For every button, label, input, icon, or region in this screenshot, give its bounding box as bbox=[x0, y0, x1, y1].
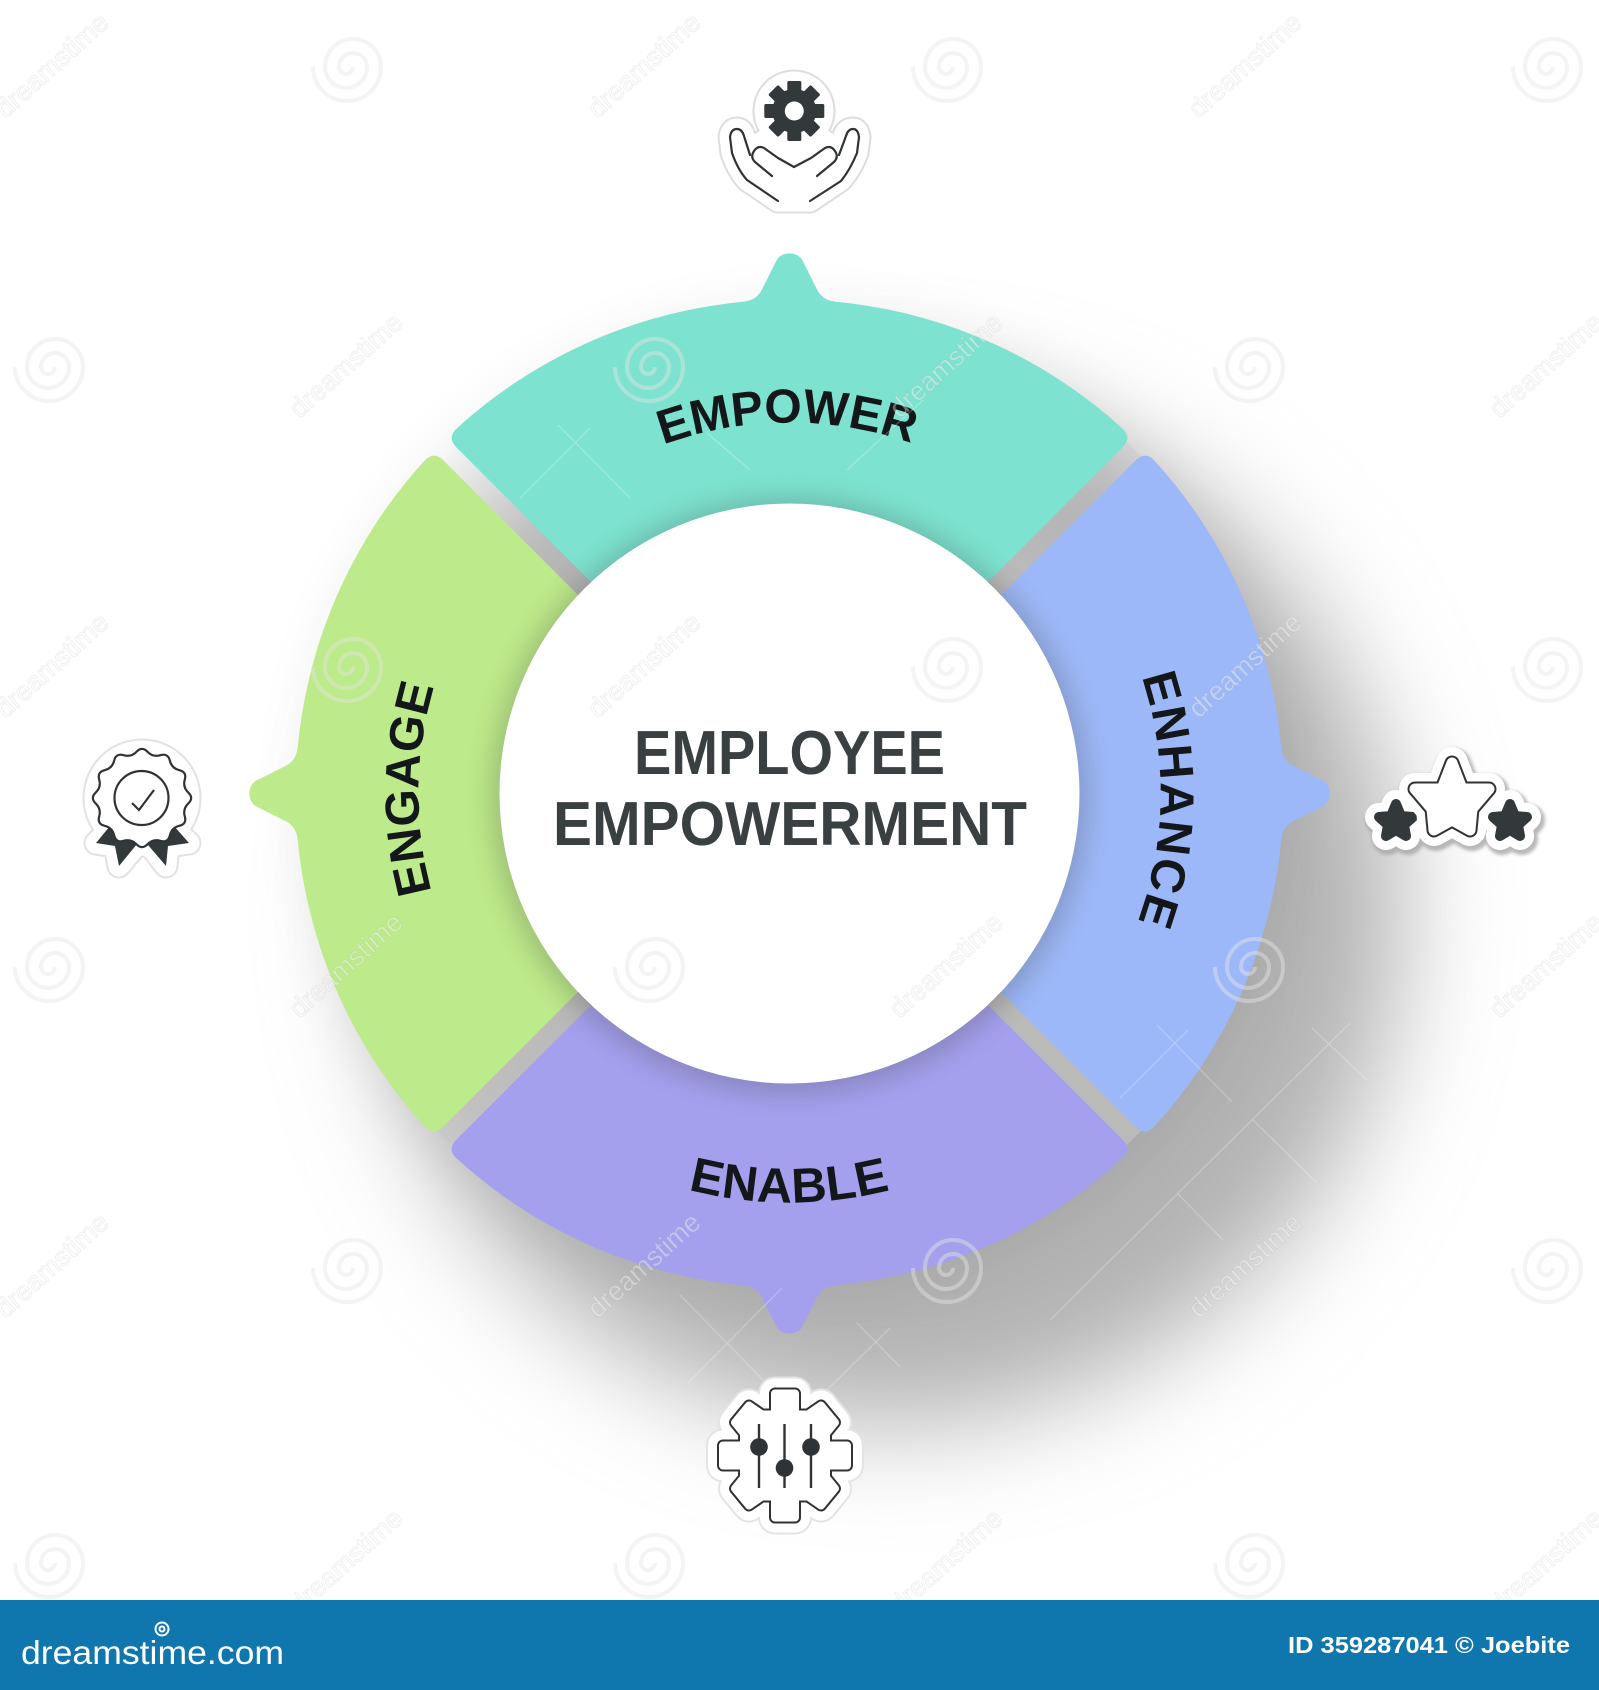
label: EMPOWER: EMPOWER bbox=[656, 389, 916, 444]
label: ENGAGE: ENGAGE bbox=[385, 680, 434, 896]
watermarks: dreamstime bbox=[1183, 7, 1307, 124]
watermarks: dreamstime bbox=[284, 307, 408, 424]
watermarks: dreamstime bbox=[1183, 607, 1307, 724]
watermarks: dreamstime bbox=[884, 907, 1008, 1024]
segment: ENHANCE bbox=[988, 456, 1330, 1131]
segment: ENGAGE bbox=[249, 456, 590, 1131]
label: ENHANCE: ENHANCE bbox=[1138, 670, 1194, 929]
title: EMPOWERMENT bbox=[553, 790, 1027, 859]
watermarks: dreamstime bbox=[284, 1503, 408, 1620]
watermarks: dreamstime bbox=[582, 1207, 706, 1324]
logo spiral bbox=[156, 1622, 168, 1636]
title: EMPLOYEE bbox=[634, 719, 945, 788]
label: ENABLE: ENABLE bbox=[691, 1158, 888, 1203]
watermarks: dreamstime bbox=[582, 7, 706, 124]
gap shading between segments bbox=[445, 449, 1134, 1138]
icon: gear in hands bbox=[730, 81, 859, 201]
footer banner bbox=[0, 1600, 1599, 1690]
watermarks: dreamstime bbox=[1183, 1207, 1307, 1324]
segment: ENABLE bbox=[452, 992, 1127, 1334]
centre circle bbox=[500, 504, 1080, 1084]
icon: badge with check mark bbox=[93, 749, 191, 866]
watermarks: dreamstime bbox=[884, 1503, 1008, 1620]
ring drop shadow bbox=[297, 302, 1401, 1424]
title bbox=[553, 719, 1027, 859]
centre circle shadow bbox=[492, 498, 1088, 1094]
logo text: dreamstime.com bbox=[21, 1634, 284, 1671]
watermarks: dreamstime bbox=[582, 607, 706, 724]
image credit: ID 359287041 © Joebite bbox=[1288, 1632, 1570, 1658]
icon: three stars bbox=[1379, 763, 1529, 839]
icon: gear with sliders bbox=[723, 1394, 847, 1518]
watermarks: dreamstime bbox=[284, 907, 408, 1024]
segment: EMPOWER bbox=[452, 253, 1127, 594]
watermarks: dreamstime bbox=[884, 307, 1008, 424]
